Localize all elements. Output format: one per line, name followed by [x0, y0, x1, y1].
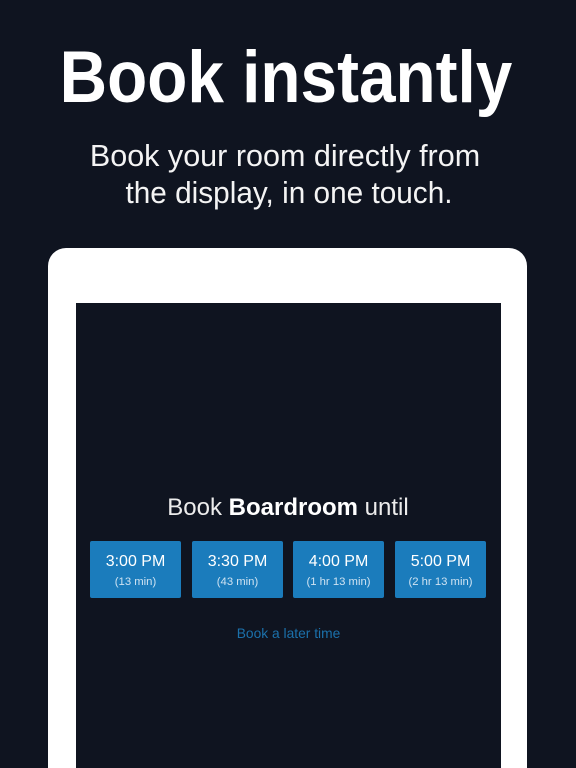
time options [90, 541, 486, 598]
button: 5:00 PM: (2 hr 13 min) [408, 576, 473, 588]
button: 3:00 PM: 3:00 PM [106, 553, 165, 570]
button: 5:00 PM: 5:00 PM [411, 553, 470, 570]
button: 4:00 PM: (1 hr 13 min) [306, 576, 371, 588]
button: 4:00 PM: 4:00 PM [309, 553, 368, 570]
button: 3:00 PM: (13 min) [115, 576, 156, 588]
button: 3:30 PM: (43 min) [217, 576, 258, 588]
button: 5:00 PM [395, 541, 486, 598]
button: 3:00 PM [90, 541, 181, 598]
tablet frame [48, 248, 527, 768]
subtitle line 1: Book your room directly from [90, 138, 480, 173]
tablet screen [76, 303, 501, 768]
subtitle line 2: the display, in one touch. [125, 175, 453, 210]
button: 3:30 PM [192, 541, 283, 598]
booking heading: Book Boardroom until [167, 494, 409, 521]
button: 3:30 PM: 3:30 PM [208, 553, 267, 570]
later time link: Book a later time [237, 626, 340, 641]
title: Book instantly [60, 37, 512, 118]
button: 4:00 PM [293, 541, 384, 598]
